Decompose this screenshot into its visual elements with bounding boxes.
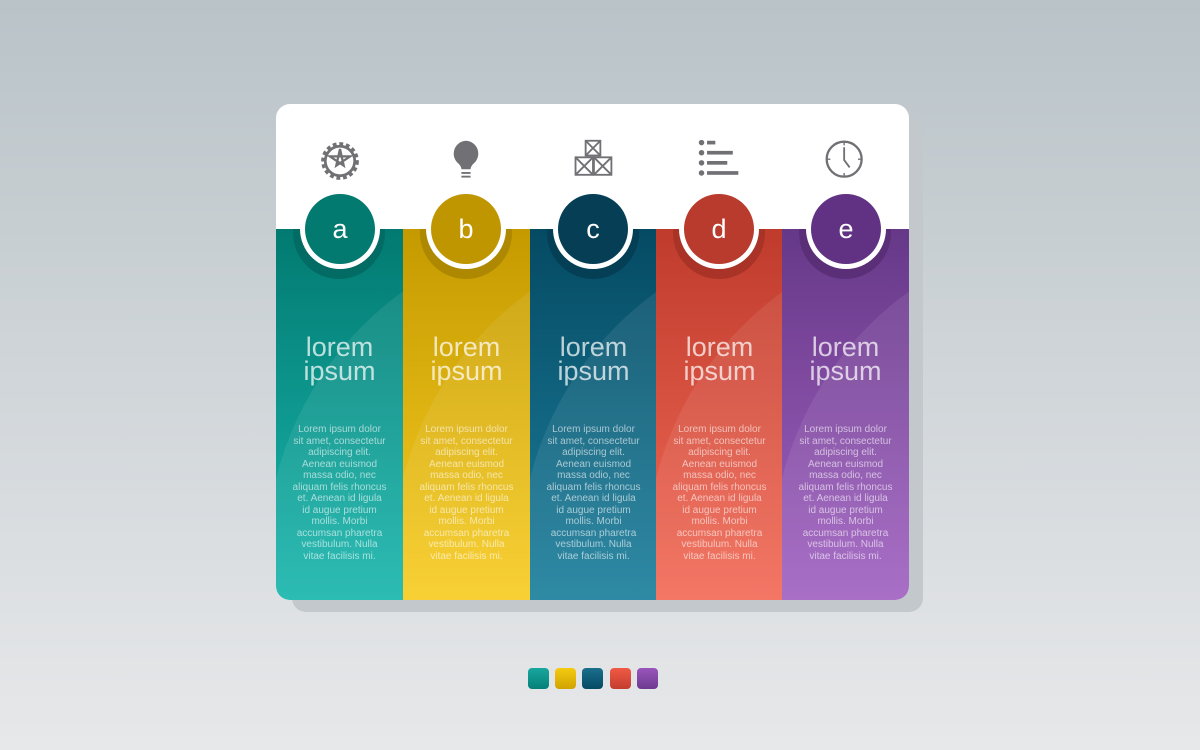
column c	[530, 229, 657, 600]
badge a: a	[332, 214, 348, 244]
icon: bulb	[454, 140, 478, 178]
body b: massa odio, nec	[430, 470, 503, 481]
heading e	[809, 332, 882, 386]
body a: id augue pretium	[302, 505, 377, 516]
body e: massa odio, nec	[809, 470, 882, 481]
body d: adipiscing elit.	[688, 447, 751, 458]
body c: et. Aenean id ligula	[551, 493, 636, 504]
body d	[672, 424, 766, 562]
badge b	[426, 189, 506, 269]
legend swatches	[528, 668, 658, 689]
badge a	[300, 189, 380, 269]
body d: Lorem ipsum dolor	[678, 424, 761, 435]
body d: aliquam felis rhoncus	[673, 482, 766, 493]
body c: aliquam felis rhoncus	[547, 482, 640, 493]
badge e	[806, 189, 886, 269]
column e	[782, 229, 909, 600]
body c: massa odio, nec	[557, 470, 630, 481]
body b: sit amet, consectetur	[420, 436, 513, 447]
body e: id augue pretium	[808, 505, 883, 516]
card	[276, 104, 909, 600]
body a: mollis. Morbi	[311, 516, 368, 527]
heading d	[683, 332, 756, 386]
heading a: lorem	[306, 332, 373, 362]
body c: sit amet, consectetur	[547, 436, 640, 447]
body b: Lorem ipsum dolor	[425, 424, 508, 435]
body d: Aenean euismod	[682, 459, 757, 470]
body b: aliquam felis rhoncus	[420, 482, 513, 493]
body b: adipiscing elit.	[435, 447, 498, 458]
body a: Aenean euismod	[302, 459, 377, 470]
heading a: ipsum	[303, 356, 376, 386]
heading c	[557, 332, 630, 386]
heading d: lorem	[686, 332, 753, 362]
body b: accumsan pharetra	[424, 528, 509, 539]
body e: aliquam felis rhoncus	[799, 482, 892, 493]
badge b: b	[458, 214, 474, 244]
body c: Aenean euismod	[556, 459, 631, 470]
body a: vestibulum. Nulla	[301, 539, 378, 550]
card shadow	[292, 116, 923, 612]
body b	[420, 424, 514, 562]
heading c: ipsum	[557, 356, 630, 386]
body d: massa odio, nec	[683, 470, 756, 481]
body b: mollis. Morbi	[438, 516, 495, 527]
body c: adipiscing elit.	[562, 447, 625, 458]
heading e: ipsum	[809, 356, 882, 386]
body d: vestibulum. Nulla	[681, 539, 758, 550]
column d	[656, 229, 783, 600]
body d: sit amet, consectetur	[673, 436, 766, 447]
body d: accumsan pharetra	[677, 528, 762, 539]
badge c: c	[586, 214, 600, 244]
badge c	[553, 189, 633, 269]
body c: mollis. Morbi	[565, 516, 622, 527]
badge e: e	[838, 214, 854, 244]
body a: accumsan pharetra	[297, 528, 382, 539]
body e: sit amet, consectetur	[799, 436, 892, 447]
body d: id augue pretium	[682, 505, 757, 516]
body e: accumsan pharetra	[803, 528, 888, 539]
body c: id augue pretium	[556, 505, 631, 516]
body a	[292, 424, 386, 562]
body a: adipiscing elit.	[308, 447, 371, 458]
body e: mollis. Morbi	[817, 516, 874, 527]
heading b: ipsum	[430, 356, 503, 386]
body d: mollis. Morbi	[691, 516, 748, 527]
body a: aliquam felis rhoncus	[293, 482, 386, 493]
heading d: ipsum	[683, 356, 756, 386]
body a: Lorem ipsum dolor	[298, 424, 381, 435]
icon: clock	[826, 140, 863, 178]
body a: vitae facilisis mi.	[303, 551, 376, 562]
heading b: lorem	[433, 332, 500, 362]
body b: Aenean euismod	[429, 459, 504, 470]
body c: vitae facilisis mi.	[557, 551, 630, 562]
body e: Lorem ipsum dolor	[804, 424, 887, 435]
body b: vestibulum. Nulla	[428, 539, 505, 550]
icon: boxes	[574, 140, 612, 176]
body a: et. Aenean id ligula	[297, 493, 382, 504]
body c	[546, 424, 640, 562]
badge d	[679, 189, 759, 269]
body c: vestibulum. Nulla	[555, 539, 632, 550]
body b: et. Aenean id ligula	[424, 493, 509, 504]
body e: Aenean euismod	[808, 459, 883, 470]
column b	[403, 229, 530, 600]
heading c: lorem	[560, 332, 627, 362]
body a: sit amet, consectetur	[293, 436, 386, 447]
body c: Lorem ipsum dolor	[552, 424, 635, 435]
body d: et. Aenean id ligula	[677, 493, 762, 504]
body c: accumsan pharetra	[551, 528, 636, 539]
heading a	[303, 332, 376, 386]
body a: massa odio, nec	[303, 470, 376, 481]
badge d: d	[711, 214, 727, 244]
body b: id augue pretium	[429, 505, 504, 516]
icon: gear	[321, 142, 359, 180]
body e	[798, 424, 892, 562]
column a	[276, 229, 403, 600]
heading b	[430, 332, 503, 386]
heading e: lorem	[812, 332, 879, 362]
body e: vestibulum. Nulla	[807, 539, 884, 550]
icon: list	[698, 140, 738, 176]
body e: et. Aenean id ligula	[803, 493, 888, 504]
body b: vitae facilisis mi.	[430, 551, 503, 562]
body e: vitae facilisis mi.	[809, 551, 882, 562]
body d: vitae facilisis mi.	[683, 551, 756, 562]
body e: adipiscing elit.	[814, 447, 877, 458]
